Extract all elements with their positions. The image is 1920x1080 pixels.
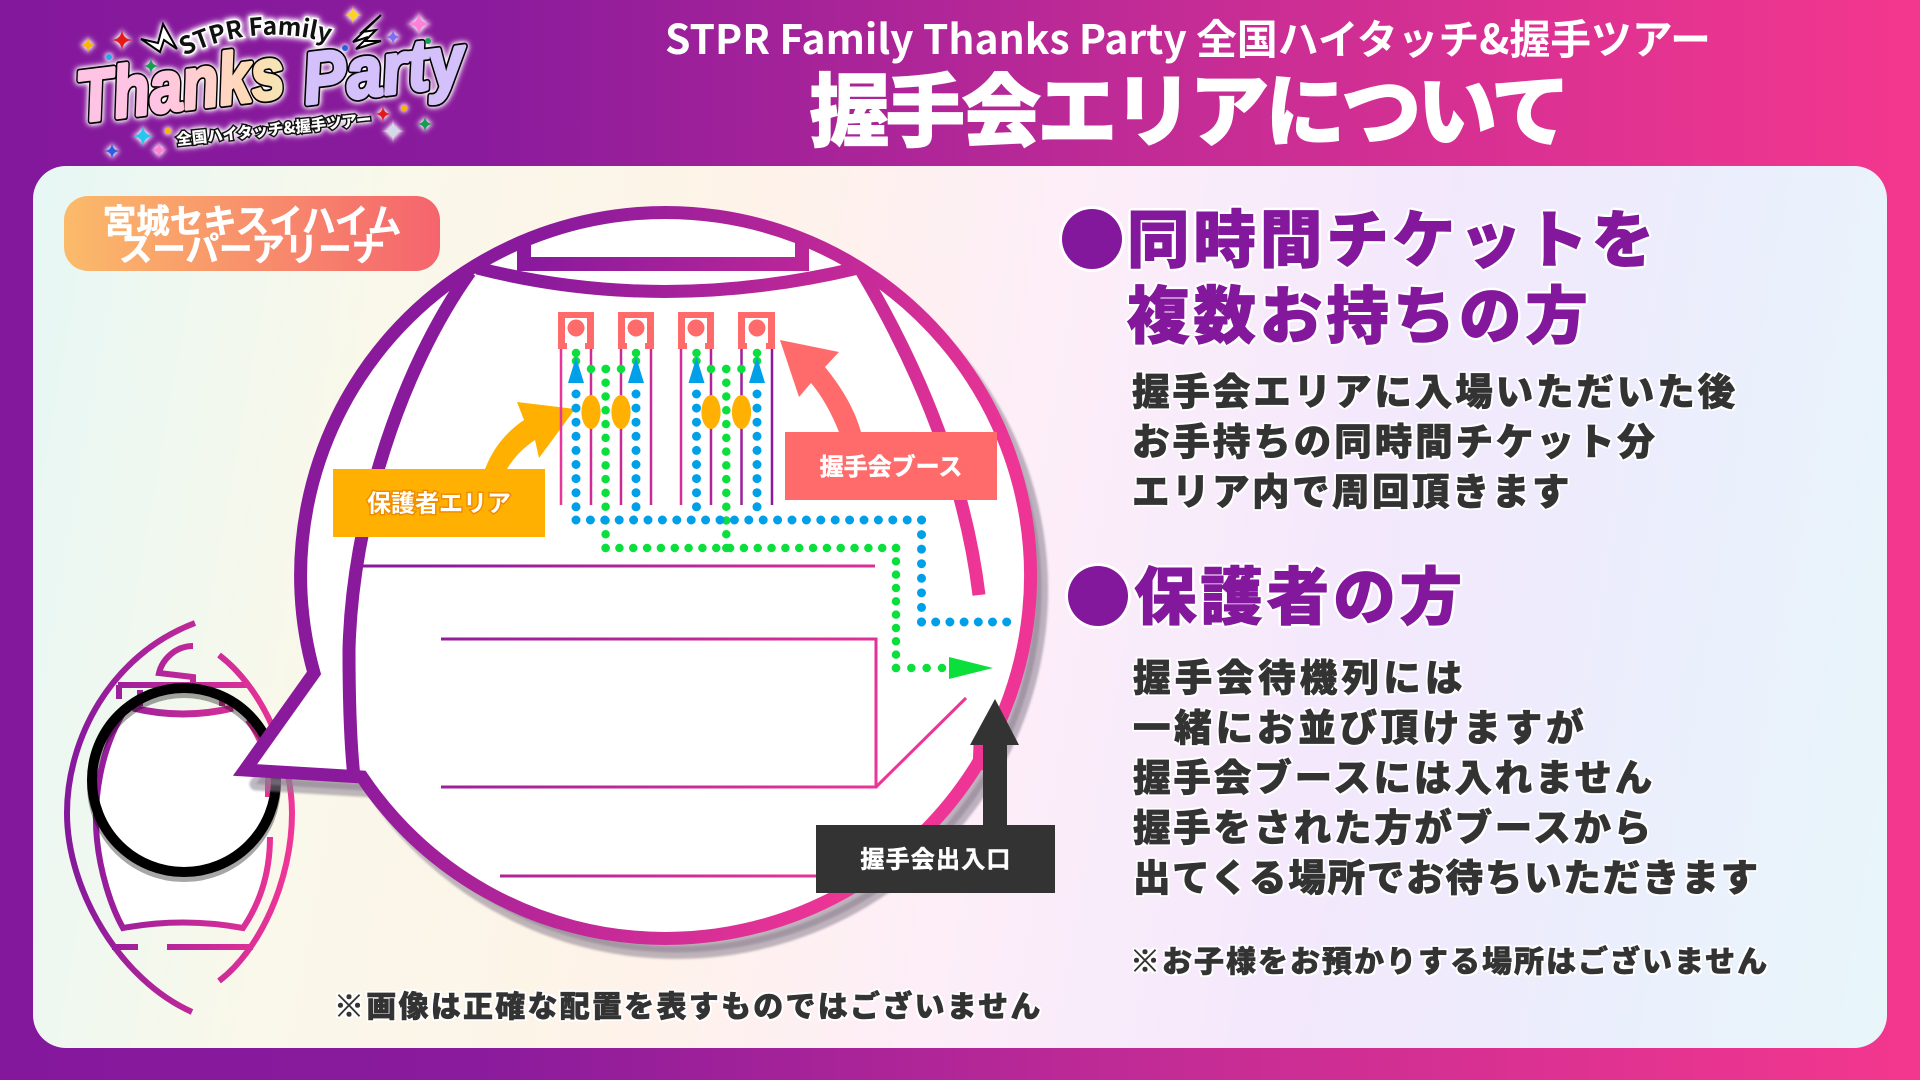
blue direction arrows: [568, 357, 765, 383]
section 2: body text: 出てくる場所でお待ちいただきます: [1133, 846, 1760, 902]
section 2: body text: 握手会ブースには入れません: [1133, 746, 1655, 802]
section 1: body text: エリア内で周回頂きます: [1132, 460, 1572, 516]
subtitle: STPR Family Thanks Party 全国ハイタッチ&握手ツアー: [665, 7, 1711, 66]
logo: STPR Family Thanks Party: 全国ハイタッチ&握手ツアー: [175, 108, 373, 150]
speech bubble shadow: [256, 226, 1042, 952]
section 1: body text: 握手会エリアに入場いただいた後: [1132, 360, 1738, 416]
venue tag: [64, 196, 440, 271]
logo: STPR Family Thanks Party: Thanks: [72, 33, 288, 138]
note: diagram disclaimer: ※画像は正確な配置を表すものではございません: [334, 982, 1043, 1026]
arrow: guardian area pointer: [485, 402, 575, 469]
venue tag: スーパーアリーナ: [119, 222, 385, 271]
logo: STPR Family Thanks Party: [70, 4, 474, 162]
lane lines: [561, 349, 772, 505]
section 1: heading: 同時間チケットを: [1127, 189, 1658, 280]
handshake booths: [558, 312, 775, 349]
section 1: heading: 複数お持ちの方: [1127, 265, 1592, 356]
panel: main content card: [33, 166, 1887, 1048]
arena structure lines: [349, 238, 979, 876]
section 1: bullet: [1062, 209, 1122, 269]
magnifier ring: [92, 688, 276, 877]
logo: STPR Family Thanks Party: Thanks: [72, 33, 288, 138]
arrow: entrance pointer: [970, 699, 1019, 825]
speech bubble zoom view: [245, 212, 1031, 938]
callout: entrance: [816, 825, 1055, 893]
venue tag: 宮城セキスイハイム: [103, 194, 401, 243]
section 2: body text: [1132, 646, 1760, 902]
section 2: body text: 一緒にお並び頂けますが: [1133, 696, 1587, 752]
small overview map: [67, 623, 292, 1012]
logo: STPR Family Thanks Party: Party: [298, 20, 472, 120]
section 1: body text: [1130, 360, 1738, 516]
arrow: booth pointer: [780, 340, 861, 432]
note: no childcare: ※お子様をお預かりする場所はございません: [1130, 936, 1769, 980]
green route dots: [576, 353, 942, 668]
section 2: body text: 握手をされた方がブースから: [1133, 796, 1654, 852]
logo: STPR Family Thanks Party: STPR Family: [174, 10, 339, 61]
callout: handshake booth: 握手会ブース: [820, 447, 962, 482]
callout: guardian area: 保護者エリア: [367, 484, 511, 518]
blue route dots: [576, 394, 1008, 622]
title: 握手会エリアについて: [809, 48, 1567, 164]
green exit arrow: [949, 657, 993, 679]
section 2: heading: 保護者の方: [1134, 546, 1466, 637]
section 2: bullet: [1068, 566, 1128, 626]
section 1: heading: [1124, 189, 1658, 356]
guardian waiting spots: [581, 395, 751, 429]
callout: entrance: 握手会出入口: [860, 840, 1012, 874]
callout: guardian area: [333, 469, 545, 537]
section 1: body text: お手持ちの同時間チケット分: [1132, 410, 1658, 466]
callout: handshake booth: [785, 432, 997, 500]
section 2: body text: 握手会待機列には: [1133, 646, 1467, 702]
logo: STPR Family Thanks Party: Party: [298, 20, 472, 120]
